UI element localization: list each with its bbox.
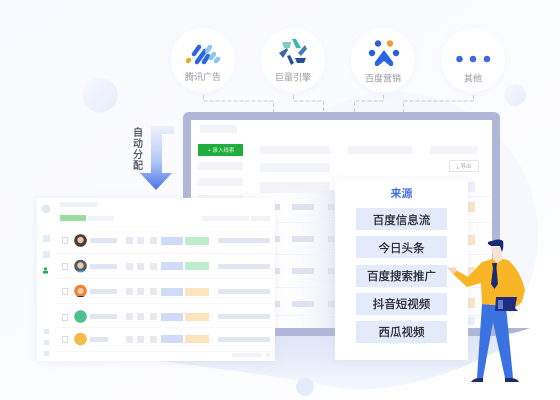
label: auto assign: 配 <box>133 160 143 172</box>
icon: user <box>43 267 48 274</box>
source: Toutiao <box>356 236 447 258</box>
source: Xigua <box>356 321 447 343</box>
source: Douyin <box>356 293 447 315</box>
source: Xigua: 西瓜视频 <box>378 325 425 339</box>
platform: Ocean Engine <box>261 28 325 92</box>
dashed connectors <box>204 95 474 112</box>
platform: Tencent Ads <box>171 28 235 92</box>
monitor table rows <box>275 182 492 328</box>
row 1 <box>62 234 270 247</box>
source: Douyin: 抖音短视频 <box>373 297 431 311</box>
auto-assign arrow <box>133 126 174 190</box>
icon: Ocean Engine <box>279 39 307 65</box>
label: Baidu Marketing: 百度营销 <box>365 72 401 84</box>
row 2 <box>62 260 270 272</box>
button: add lead: + 录入线索 <box>208 146 235 154</box>
label: auto assign <box>133 126 143 172</box>
source: Baidu feed: 百度信息流 <box>373 213 431 227</box>
card heading: 来源 <box>390 186 412 200</box>
source: Baidu search: 百度搜索推广 <box>367 269 436 283</box>
label: Others: 其他 <box>464 72 482 84</box>
row 3 <box>62 285 270 297</box>
sidebar <box>42 204 50 356</box>
label: auto assign: 分 <box>133 149 143 161</box>
source: Baidu search <box>356 265 447 287</box>
monitor <box>183 112 500 336</box>
icon: Tencent Ads <box>188 47 218 62</box>
source: Toutiao: 今日头条 <box>378 241 425 255</box>
tablet <box>495 297 518 311</box>
sources card <box>335 179 468 360</box>
decorative orb right <box>504 84 526 106</box>
button: export: ⤓ 导出 <box>457 162 471 170</box>
monitor sidebar placeholders <box>198 162 243 198</box>
source: Baidu feed <box>356 208 447 230</box>
button: add lead <box>198 144 243 156</box>
label: auto assign: 动 <box>133 138 143 150</box>
torso and arms <box>453 259 525 312</box>
legs <box>477 304 513 378</box>
platform: Others <box>441 28 505 92</box>
label: Ocean Engine: 巨量引擎 <box>275 72 311 82</box>
label: Tencent Ads: 腾讯广告 <box>185 71 221 82</box>
panel header <box>56 202 275 352</box>
label: auto assign: 自 <box>133 126 143 139</box>
icon: Baidu Marketing <box>369 40 399 66</box>
neck and face <box>491 246 502 263</box>
decorative orb left <box>82 78 118 112</box>
row 4 <box>62 310 270 323</box>
shadow under monitor <box>150 336 500 389</box>
pagination <box>232 353 270 357</box>
hand <box>447 267 457 274</box>
decorative orb bottom <box>296 378 314 396</box>
tie <box>491 263 498 289</box>
monitor base tip <box>468 328 530 336</box>
shoes <box>471 378 483 382</box>
hair <box>488 240 503 252</box>
monitor filter placeholders <box>260 146 478 193</box>
platform: Baidu Marketing <box>351 28 415 92</box>
monitor screen header <box>200 125 237 133</box>
presenter figure <box>447 240 525 382</box>
leads table panel <box>37 198 275 361</box>
button: export <box>450 160 478 172</box>
row 5 <box>62 333 270 345</box>
icon: more dots <box>456 56 490 62</box>
